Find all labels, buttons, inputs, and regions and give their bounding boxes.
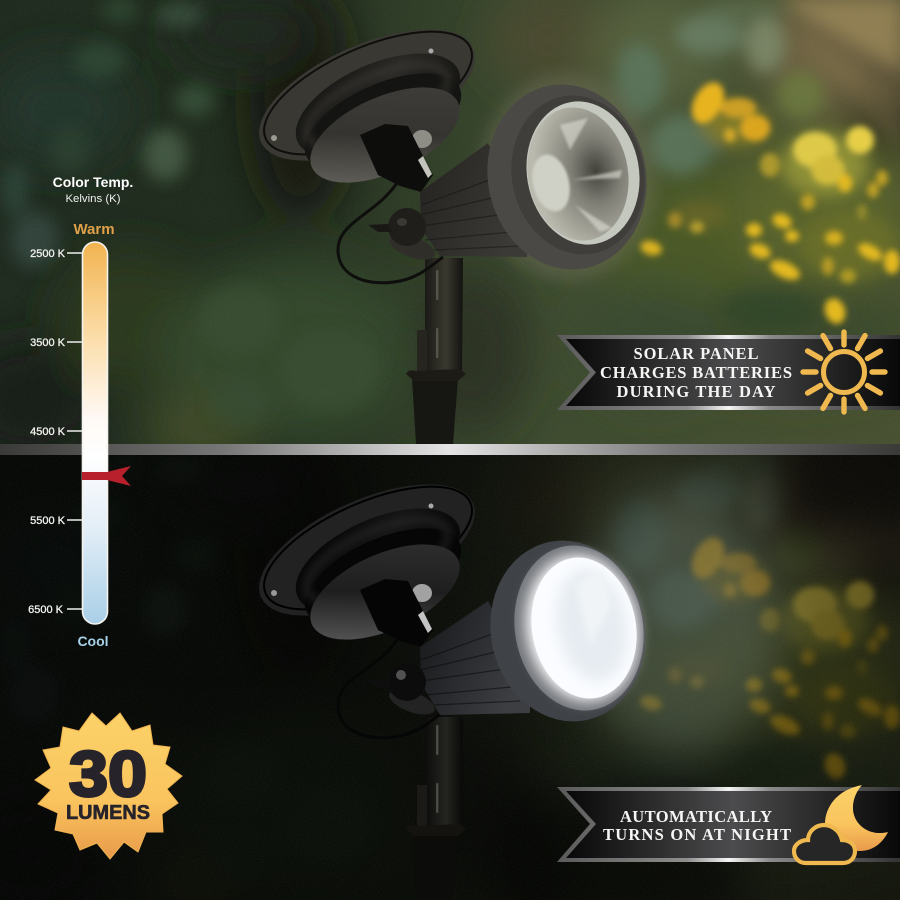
stake [406, 717, 466, 900]
scale subheading: Kelvins (K) [65, 193, 121, 205]
ticks [67, 253, 82, 609]
haze around lamp head [480, 73, 656, 281]
bracket and sensor [360, 579, 433, 647]
wire [338, 640, 443, 738]
wire [338, 183, 443, 283]
sun rays top right [786, 0, 900, 142]
icon: cloud [794, 825, 855, 863]
lens inner rim [497, 83, 659, 267]
banner text line 2: CHARGES BATTERIES [600, 363, 792, 382]
lamp: nighttime [241, 457, 662, 900]
lamp head body [366, 601, 530, 720]
banner: solar panel [557, 332, 900, 412]
background: daytime garden [0, 0, 900, 470]
lamp head ring [470, 70, 664, 284]
banner text line 3: DURING THE DAY [616, 382, 776, 401]
warm label: Warm [73, 221, 115, 238]
lamp head body [368, 143, 530, 265]
starburst [35, 713, 182, 859]
lens [515, 92, 651, 254]
unit: LUMENS [66, 802, 150, 824]
lens outer silver rim [502, 535, 656, 721]
ribbon interior [566, 339, 900, 406]
dark overlay on left and top right [500, 455, 900, 900]
banner text line 1: SOLAR PANEL [634, 344, 758, 363]
stake [406, 258, 466, 444]
thermometer bar [82, 242, 108, 624]
banner text line 2: TURNS ON AT NIGHT [603, 825, 791, 844]
solar panel disc [241, 2, 493, 202]
lamp head ring [474, 526, 662, 736]
badge: 30 lumens [35, 713, 182, 859]
ribbon interior [566, 791, 900, 858]
red marker [82, 466, 131, 486]
color temperature scale [28, 174, 133, 649]
lens glow [515, 547, 649, 709]
label 3500 K: 3500 K [30, 337, 66, 349]
banner: night [557, 785, 900, 863]
number: 30 [69, 738, 147, 810]
banner text line 1: AUTOMATICALLY [620, 807, 772, 826]
divider bar [0, 444, 900, 455]
icon: moon [825, 785, 888, 851]
ribbon [557, 335, 900, 410]
light pool from lamp [580, 495, 780, 755]
label 2500 K: 2500 K [30, 248, 66, 260]
background: night garden [0, 415, 900, 900]
lamp: daytime [241, 2, 664, 444]
label 5500 K: 5500 K [30, 515, 66, 527]
cool label: Cool [77, 633, 109, 649]
bracket and sensor [360, 124, 433, 192]
label 4500 K: 4500 K [30, 426, 66, 438]
lens [520, 549, 648, 707]
solar panel disc [241, 457, 493, 659]
label 6500 K: 6500 K [28, 604, 64, 616]
icon: sun [803, 332, 885, 412]
scale heading: Color Temp. [53, 174, 133, 190]
ribbon [557, 787, 900, 862]
